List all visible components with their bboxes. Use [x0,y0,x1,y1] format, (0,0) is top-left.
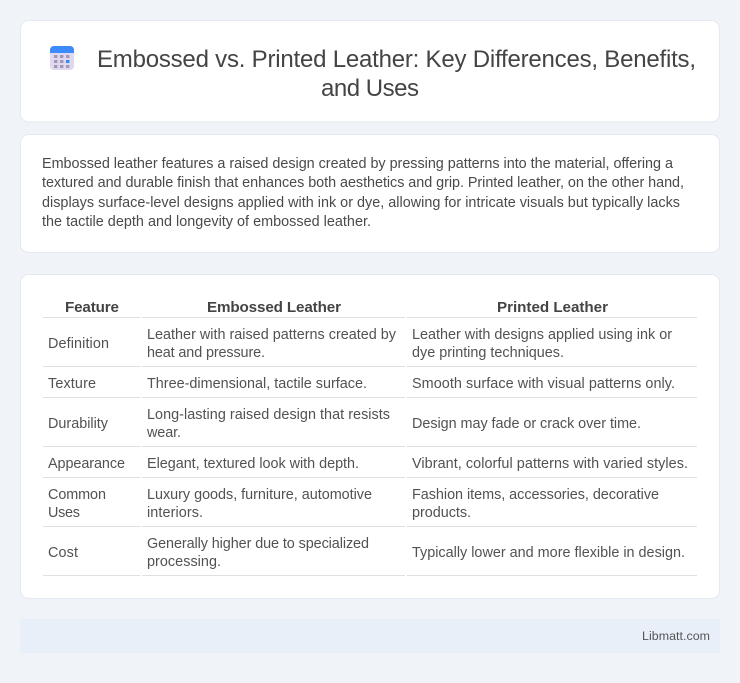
title: Embossed vs. Printed Leather: Key Differences, Benefits, [97,46,696,73]
icon: calendar [50,46,74,70]
panel: header [20,20,720,122]
row: cost: Typically lower and more flexible in design. [412,545,685,561]
title: and Uses [321,75,419,102]
text block: intro paragraph: Embossed leather features a raised design created by pressing patterns into the material, offering a [42,156,673,172]
row: definition: Leather with designs applied using ink or [412,327,672,343]
row: definition: heat and pressure. [147,345,265,361]
row: durability [48,407,641,441]
panel: comparison table [20,274,720,598]
row: cost: processing. [147,554,221,570]
row: appearance: Elegant, textured look with depth. [147,456,359,472]
title [97,46,696,102]
footer [20,619,720,653]
row: common uses: Uses [48,505,80,521]
row: common uses: Luxury goods, furniture, automotive [147,487,372,503]
row: cost: Cost [48,545,78,561]
row: durability: Durability [48,416,109,432]
table header row [65,299,608,316]
row: texture: Three-dimensional, tactile surface. [147,376,367,392]
row: definition: Leather with raised patterns created by [147,327,397,343]
row: appearance: Vibrant, colorful patterns with varied styles. [412,456,688,472]
text block: intro paragraph: textured and durable finish that enhances both aesthetics and grip. Printed leather, on the other hand, [42,175,684,191]
row: durability: Long-lasting raised design that resists [147,407,390,423]
row: appearance [48,456,688,472]
text block: intro paragraph: displays surface-level designs applied with ink or dye, allowing for intricate visuals but typically lacks [42,195,680,211]
row: durability: Design may fade or crack over time. [412,416,641,432]
row: common uses [48,487,659,521]
row: common uses: Common [48,487,106,503]
text block: intro paragraph [42,156,684,230]
row: texture: Smooth surface with visual patterns only. [412,376,675,392]
row: texture: Texture [48,376,96,392]
row: appearance: Appearance [48,456,125,472]
row: definition: Definition [48,336,109,352]
row: texture [48,376,675,392]
row: cost: Generally higher due to specialized [147,536,369,552]
row: definition: dye printing techniques. [412,345,564,361]
footer source text: Libmatt.com [642,629,710,643]
row: definition [48,327,672,361]
row: common uses: products. [412,505,471,521]
text block: intro paragraph: the tactile depth and longevity of embossed leather. [42,214,371,230]
row: durability: wear. [146,425,181,441]
table header row: Feature [65,299,119,316]
panel: intro text [20,134,720,252]
table header row: Embossed Leather [207,299,341,316]
row: common uses: Fashion items, accessories, decorative [412,487,659,503]
row: cost [48,536,685,570]
table header row: Printed Leather [497,299,608,316]
row: common uses: interiors. [147,505,203,521]
